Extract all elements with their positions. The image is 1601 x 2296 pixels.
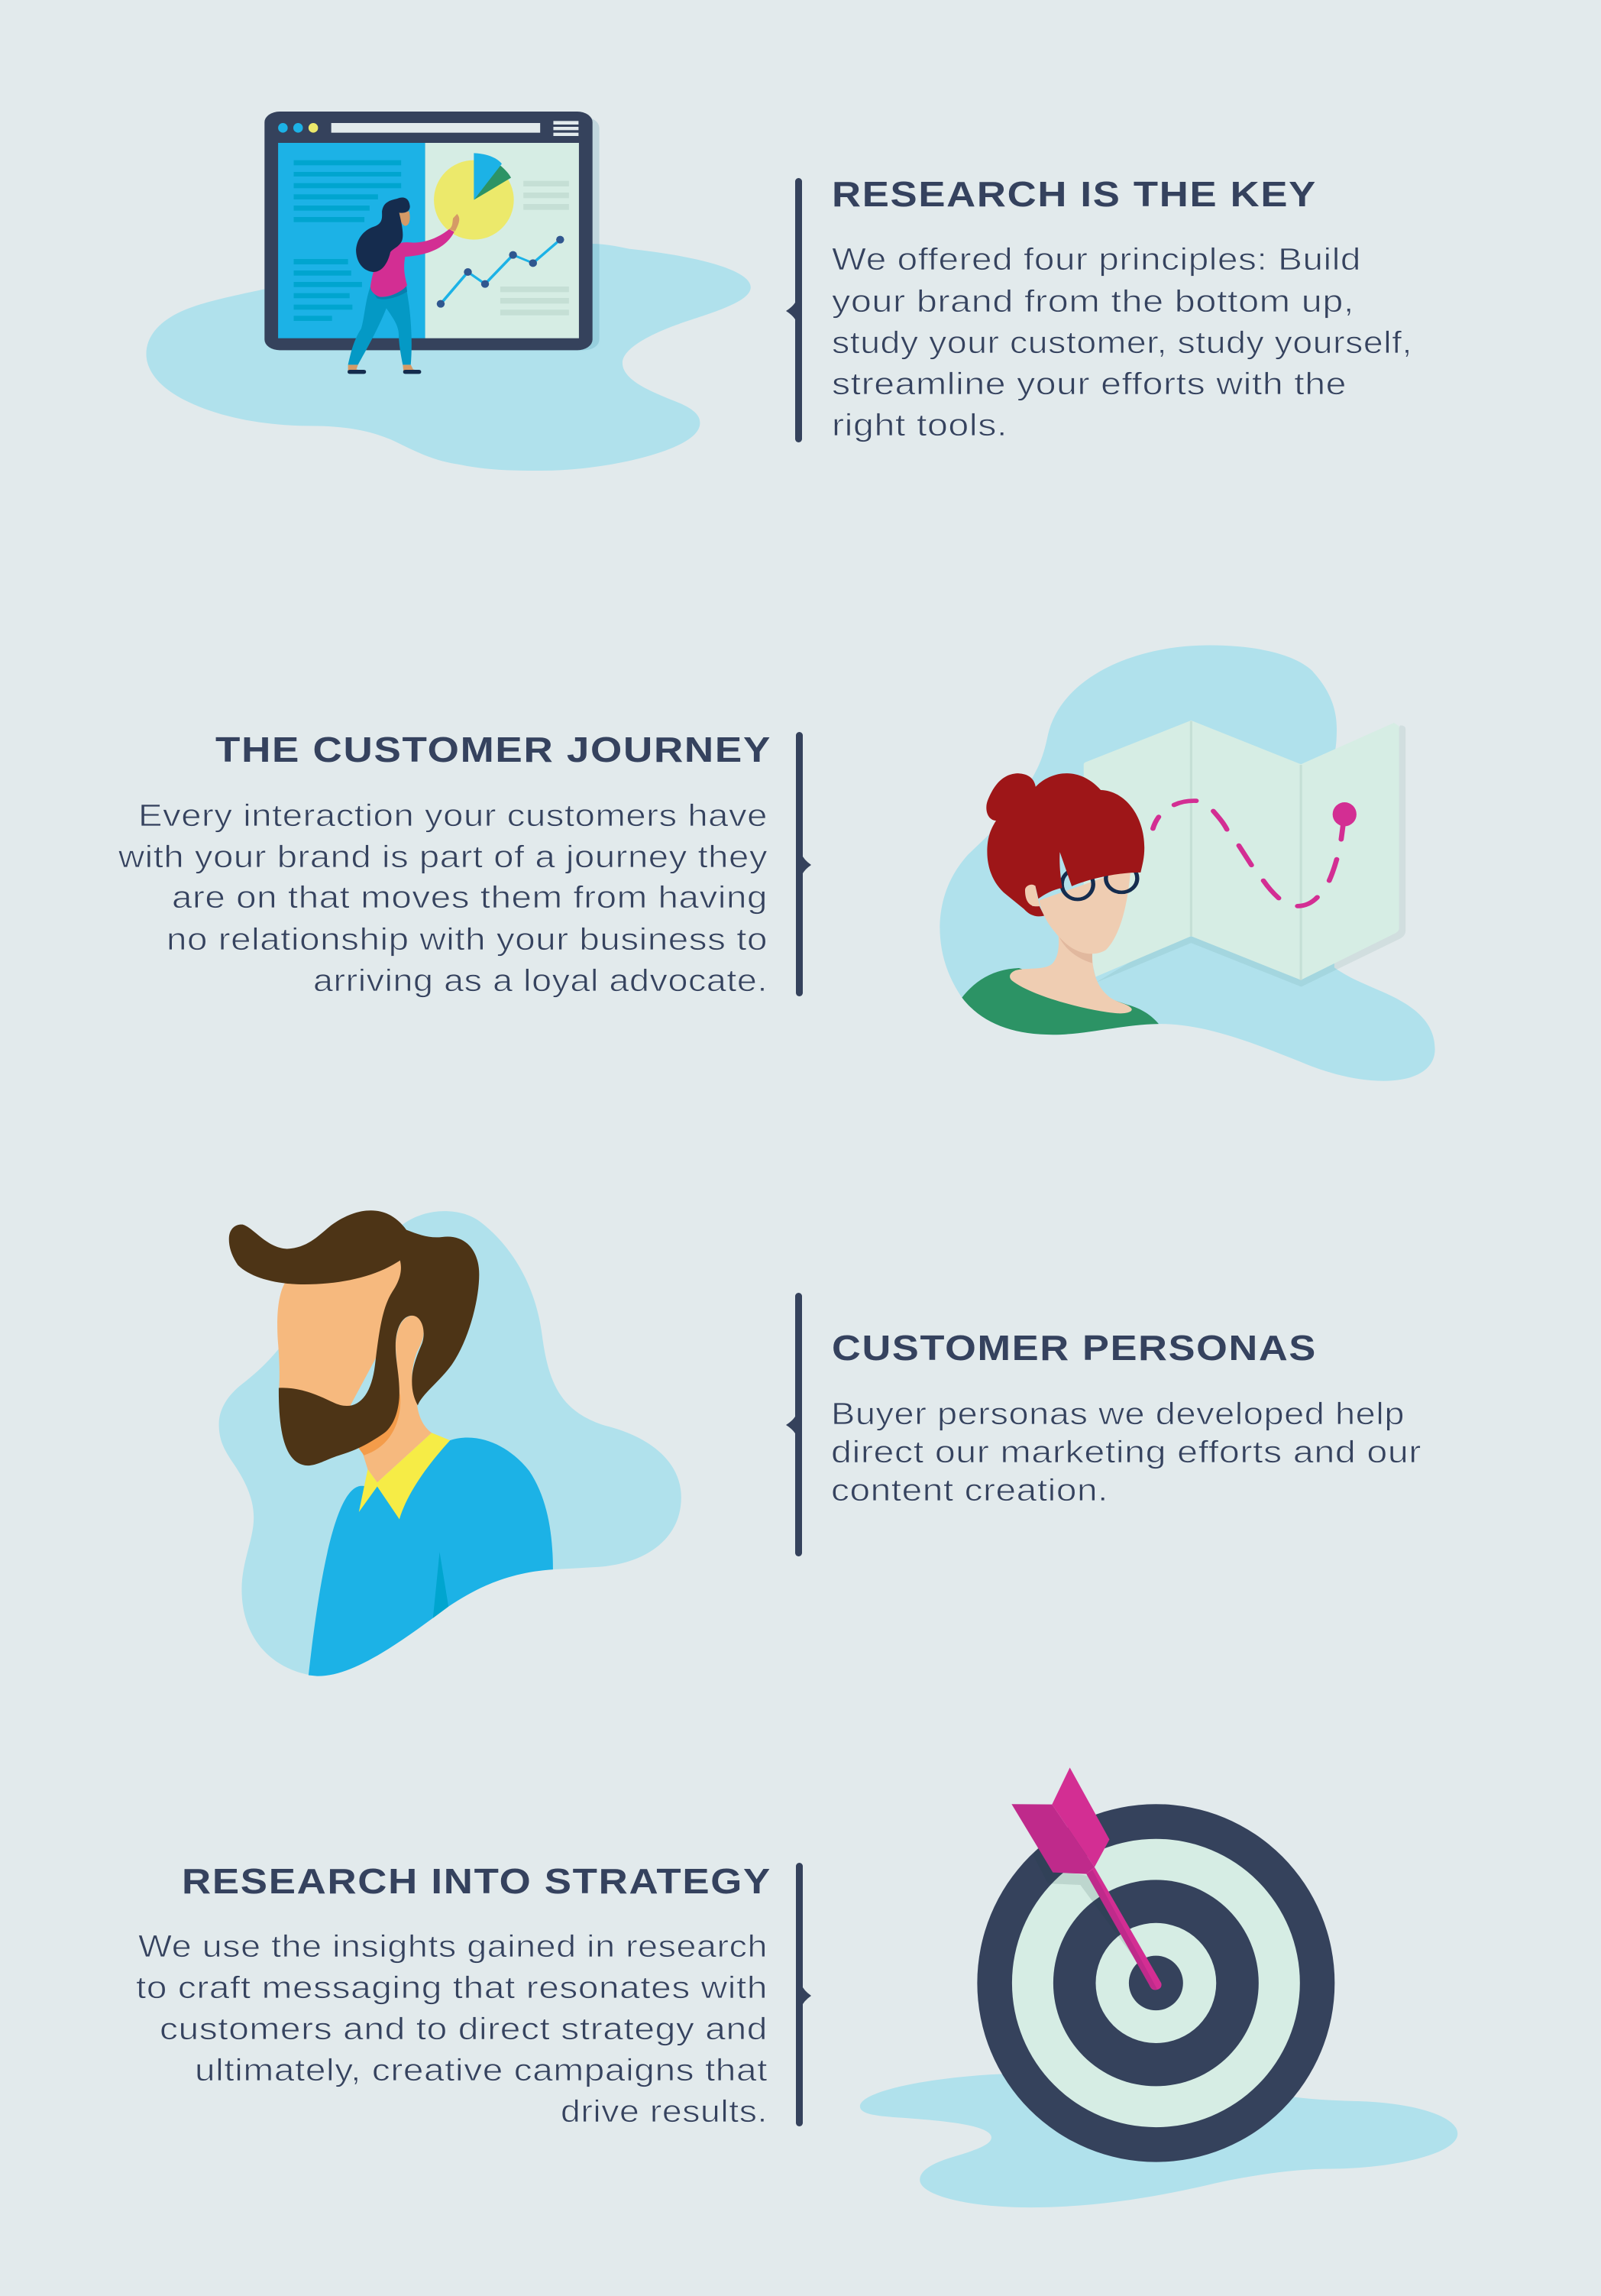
body text: direct our marketing efforts and our xyxy=(831,1434,1421,1469)
body text: to craft messaging that resonates with xyxy=(136,1970,768,2005)
divider bracket 1 xyxy=(786,178,802,442)
body text: ultimately, creative campaigns that xyxy=(195,2052,768,2087)
heading: CUSTOMER PERSONAS xyxy=(832,1328,1317,1368)
divider bracket 3 xyxy=(786,1293,802,1556)
section: The customer journey xyxy=(118,730,811,998)
blob background 1 xyxy=(147,244,751,471)
body text xyxy=(118,798,768,998)
body text: customers and to direct strategy and xyxy=(160,2011,768,2046)
body text: Every interaction your customers have xyxy=(138,798,768,833)
line chart xyxy=(437,236,564,308)
pie chart xyxy=(434,153,514,240)
illustration: bearded man xyxy=(219,1210,681,1676)
section: Research into strategy xyxy=(136,1861,811,2129)
body text: We offered four principles: Build xyxy=(832,241,1361,277)
body text: study your customer, study yourself, xyxy=(832,325,1412,360)
body text: streamline your efforts with the xyxy=(832,366,1347,401)
browser window xyxy=(264,112,600,350)
body text: arriving as a loyal advocate. xyxy=(313,963,768,998)
body text xyxy=(136,1928,768,2129)
presenter figure xyxy=(348,197,459,374)
body text: are on that moves them from having xyxy=(172,879,768,915)
divider bracket 4 xyxy=(796,1863,811,2126)
body text: content creation. xyxy=(831,1472,1108,1507)
blob background 3 xyxy=(219,1211,681,1676)
dashed route with pin xyxy=(1153,801,1357,906)
folded map xyxy=(1084,721,1405,986)
heading: RESEARCH IS THE KEY xyxy=(832,174,1317,214)
man figure xyxy=(229,1210,553,1676)
body text: no relationship with your business to xyxy=(167,921,768,957)
woman with red hair xyxy=(962,773,1159,1035)
heading: RESEARCH INTO STRATEGY xyxy=(182,1861,771,1901)
illustration: woman presenting at browser window xyxy=(147,112,751,471)
body text: right tools. xyxy=(832,407,1007,442)
section: Research is the key xyxy=(786,174,1412,442)
body text: with your brand is part of a journey they xyxy=(118,839,768,874)
target rings xyxy=(977,1804,1334,2162)
blob background 2 xyxy=(940,646,1435,1081)
body text: Buyer personas we developed help xyxy=(831,1396,1405,1431)
illustration: woman with glasses and map xyxy=(940,646,1435,1081)
body text: We use the insights gained in research xyxy=(138,1928,768,1964)
body text xyxy=(832,241,1412,442)
heading: THE CUSTOMER JOURNEY xyxy=(215,730,771,769)
body text: your brand from the bottom up, xyxy=(832,283,1354,319)
blob background 4 xyxy=(860,2047,1457,2207)
body text: drive results. xyxy=(561,2094,768,2129)
divider bracket 2 xyxy=(796,732,811,996)
illustration: target with dart xyxy=(860,1767,1457,2207)
section: Customer personas xyxy=(786,1293,1421,1556)
body text xyxy=(831,1396,1421,1507)
dart xyxy=(1011,1767,1162,1990)
